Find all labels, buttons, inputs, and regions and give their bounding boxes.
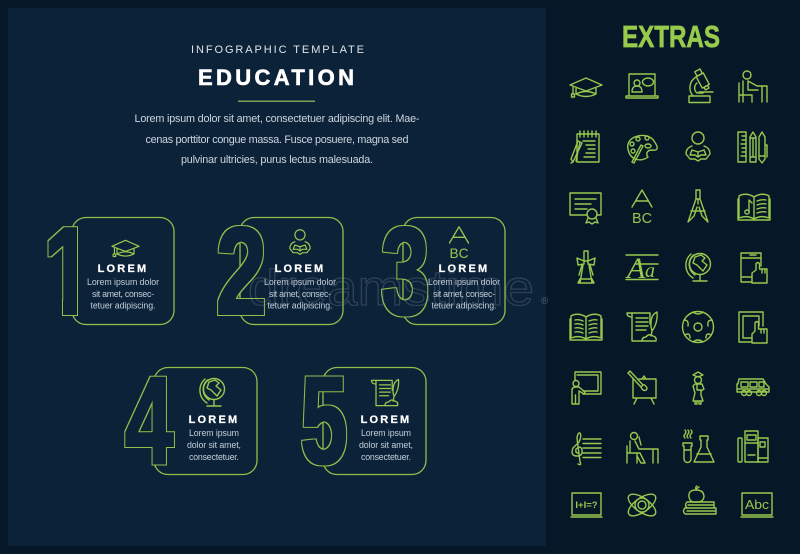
card 2 heading: LOREM [275,263,325,275]
icon: student at desk [739,71,767,102]
icon: open book [570,314,602,340]
icon: painting easel [628,371,656,404]
card 2 [216,203,343,341]
icon: treble clef and staff [572,433,601,465]
icon: graduation cap [570,78,602,97]
watermark: dreamstime [248,260,534,316]
card 5 text: Lorem ipsum [361,428,411,438]
card 3 text: Lorem ipsum dolor [428,277,500,287]
card 4 heading: LOREM [189,414,239,426]
card 5 text [359,428,413,462]
icon: test tube and flask [683,430,714,462]
icon: drawing compass [688,190,708,222]
icon: ruler, pencil and pen [738,132,767,163]
icon: row of books [738,431,768,462]
card 5 text: dolor sit amet, [359,440,413,450]
icon: scroll and quill [372,380,399,406]
icon: chalkboard with sum [571,493,602,517]
card 1 heading: LOREM [98,263,148,275]
card 3 text: sit amet, consec- [433,289,495,299]
icon: student writing at desk [627,432,658,463]
card 3 [381,202,505,341]
number 5: 5 [300,351,347,490]
card 4 text: Lorem ipsum [189,428,239,438]
icon: cursive letters: a [645,260,655,282]
card 2 text: Lorem ipsum dolor [264,277,336,287]
intro paragraph [134,113,420,166]
heading: infographic template: INFOGRAPHIC TEMPLATE [191,44,364,56]
panel: main infographic [8,8,546,546]
icon: apple on books [684,486,716,514]
icon: notepad and pencil [571,131,599,163]
icon: scroll and quill [627,312,657,341]
icon grid: extras [570,69,773,520]
icon: cursive letters: A [625,252,646,285]
card 3 heading: LOREM [439,263,489,275]
icon: desk globe [686,254,710,281]
icon: painter palette [628,135,657,163]
icon: cursive letters [625,252,658,285]
icon: chalkboard with sum: I+I=? [575,500,598,511]
icon: globe [200,378,224,406]
icon: teacher at blackboard [572,372,601,404]
icon: graduation cap [112,240,139,256]
number 2: 2 [216,203,267,341]
intro paragraph: Lorem ipsum dolor sit amet, consectetuer adipiscing elit. Mae- [134,113,420,125]
card 5 [300,351,426,490]
intro paragraph: cenas porttitor congue massa. Fusce posuere, magna sed [146,134,408,146]
title: education: EDUCATION [198,65,354,90]
icon: chalkboard with letters: Abc [745,497,770,512]
icon: soccer ball [682,312,714,342]
card 2 text [264,277,336,310]
title underline [238,100,315,102]
card 4 text: consectetuer. [189,452,239,462]
number 4: 4 [125,351,174,490]
intro paragraph: pulvinar ultricies, purus lectus malesuada. [181,154,373,166]
icon: laptop with video call [626,74,658,98]
icon: graduate figure [693,372,704,404]
icon: chalkboard with letters [741,493,773,517]
number 3: 3 [381,202,429,341]
icon: open music book [738,194,770,220]
card 2 text: tetuer adipiscing. [268,300,332,310]
card 5 heading: LOREM [361,414,411,426]
icon: student reading [290,230,310,254]
card 1 [48,216,175,326]
icon: tablet with hand [739,312,767,343]
card 4 text [187,428,241,462]
icon: smartphone with hand [741,253,767,283]
card 4 text: dolor sit amet, [187,440,241,450]
icon: ABC letters [450,227,468,262]
icon: certificate [570,193,601,224]
card 3 text [428,277,500,310]
icon: student reading [686,132,710,161]
card 3 text: tetuer adipiscing. [432,300,496,310]
card 1 text: Lorem ipsum dolor [87,277,159,287]
watermark: ® [541,296,549,307]
card 4 [125,351,257,490]
card 1 text: sit amet, consec- [92,289,154,299]
number 1: 1 [43,202,93,340]
extras heading: EXTRAS [622,19,720,54]
card 1 text: tetuer adipiscing. [90,300,156,310]
icon: microscope [689,69,713,102]
icon: ABC letters [632,190,652,227]
icon: school bell [577,251,595,283]
card 2 text: sit amet, consec- [269,289,331,299]
card 5 text: consectetuer. [361,452,411,462]
card 1 text [87,277,159,310]
icon: atom [625,490,659,520]
icon: school bus [737,379,769,396]
